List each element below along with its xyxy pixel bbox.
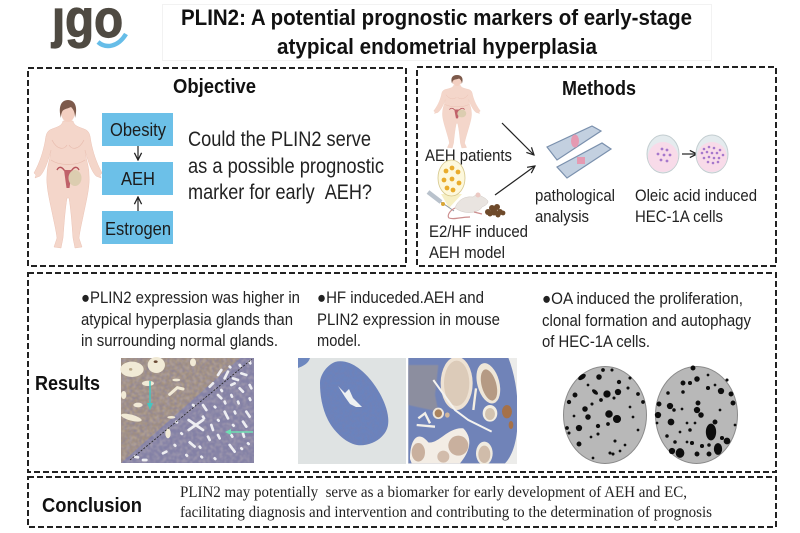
arrow: patients to pathology	[502, 123, 534, 155]
icon: pathology slides	[547, 126, 611, 178]
title	[162, 4, 712, 60]
label: E2/HF induced AEH model: AEH model	[429, 244, 505, 262]
icon: food pellets	[485, 204, 505, 218]
title: atypical endometrial hyperplasia	[277, 34, 598, 59]
result text: mouse model: PLIN2 expression in mouse	[317, 311, 500, 329]
label: pathological analysis: pathological	[535, 187, 615, 205]
image: colony formation dish 1	[564, 366, 646, 464]
result text: atypical hyperplasia glands	[81, 289, 300, 350]
label: oleic acid induced HEC-1A cells: HEC-1A cells	[635, 208, 723, 226]
result text: HEC-1A cells: of HEC-1A cells.	[542, 333, 650, 351]
box: obesity: Obesity	[110, 120, 166, 140]
heading: results: Results	[35, 373, 100, 395]
heading: methods: Methods	[562, 78, 636, 100]
result text: atypical hyperplasia glands: atypical hyperplasia glands than	[81, 311, 293, 329]
label: oleic acid induced HEC-1A cells: Oleic acid induced	[635, 187, 757, 205]
icon: culture dish before	[647, 135, 679, 173]
result text: atypical hyperplasia glands: in surrounding normal glands.	[81, 332, 278, 350]
label: oleic acid induced HEC-1A cells	[635, 187, 757, 226]
box: AEH: AEH	[121, 169, 155, 189]
result text: atypical hyperplasia glands: ●PLIN2 expression was higher in	[81, 289, 300, 307]
arrow: culture progression	[682, 153, 697, 155]
panel: conclusion	[28, 477, 776, 527]
box: AEH	[102, 162, 173, 195]
icon: high-fat diet droplets	[438, 160, 465, 208]
image: human histology section	[120, 357, 254, 463]
result text: HEC-1A cells: clonal formation and autophagy	[542, 312, 752, 330]
heading: conclusion: Conclusion	[42, 495, 142, 517]
panel: methods	[417, 67, 776, 266]
box: estrogen	[102, 211, 173, 244]
objective question: marker for early AEH?	[188, 181, 372, 204]
result text: mouse model: model.	[317, 332, 361, 350]
result text: mouse model	[317, 289, 500, 350]
box: estrogen: Estrogen	[105, 219, 171, 239]
arrow: mouse model to pathology	[495, 166, 535, 195]
label: pathological analysis	[535, 187, 615, 226]
heading: objective: Objective	[173, 76, 256, 98]
panel: objective	[28, 68, 406, 266]
conclusion text	[180, 484, 712, 521]
icon: syringe	[428, 192, 454, 211]
label: E2/HF induced AEH model: E2/HF induced	[429, 223, 528, 241]
image: mouse uterus section, HF induced	[408, 357, 518, 465]
result text: HEC-1A cells	[542, 290, 752, 351]
icon: culture dish after	[696, 135, 728, 173]
panel: results	[28, 273, 776, 472]
arrow: obesity to AEH	[137, 146, 139, 160]
conclusion text: facilitating diagnosis and intervention and contributing to the determination of prognosis	[180, 504, 712, 521]
label: pathological analysis: analysis	[535, 208, 589, 226]
arrow: estrogen to AEH	[137, 197, 139, 211]
image: colony formation dish 2	[655, 366, 738, 464]
objective question: as a possible prognostic	[188, 155, 384, 178]
result text: HEC-1A cells: ●OA induced the proliferation,	[542, 290, 743, 308]
title: PLIN2: A potential prognostic markers of early-stage	[181, 5, 692, 30]
objective question	[188, 128, 384, 204]
result text: mouse model: ●HF induceded.AEH and	[317, 289, 484, 307]
icon: AEH patient	[434, 75, 480, 148]
box: obesity	[102, 113, 173, 146]
label: AEH patients: AEH patients	[425, 147, 512, 165]
icon: woman with uterus	[34, 100, 102, 248]
icon: mouse	[448, 192, 488, 219]
label: E2/HF induced AEH model	[429, 223, 528, 262]
objective question: Could the PLIN2 serve	[188, 128, 371, 151]
image: mouse uterus section, control	[298, 358, 406, 464]
conclusion text: PLIN2 may potentially serve as a biomarker for early development of AEH and EC,	[180, 484, 687, 501]
